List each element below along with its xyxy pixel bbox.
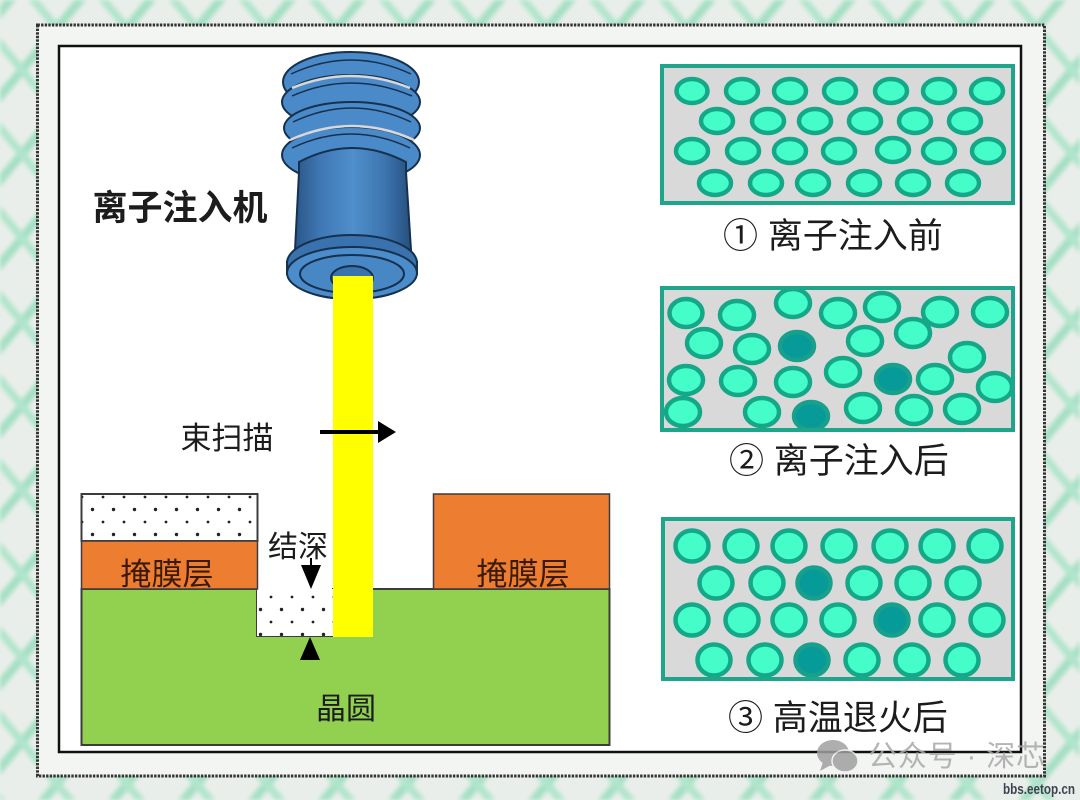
junction depth label: 结深 xyxy=(268,531,328,564)
ion implanter machine xyxy=(282,52,420,299)
cylinder body xyxy=(295,148,411,250)
wafer xyxy=(82,589,610,745)
panel 2: after implantation xyxy=(662,288,1013,430)
caption 2: ② 离子注入后 xyxy=(729,442,949,481)
caption 1: ① 离子注入前 xyxy=(723,217,943,256)
implanted region xyxy=(257,589,333,636)
disordered atoms xyxy=(666,289,1012,430)
lattice atoms 1 xyxy=(676,79,1004,195)
left mask layer: 掩膜层 xyxy=(120,557,214,592)
caption 3: ③ 高温退火后 xyxy=(728,699,948,738)
panel 1: before implantation xyxy=(662,66,1013,203)
label: wafer: 晶圆 xyxy=(316,693,376,726)
arrow: beam scan xyxy=(320,421,396,443)
right mask layer: 掩膜层 xyxy=(476,557,570,592)
re-ordered atoms xyxy=(676,530,1004,676)
arrow: junction depth top xyxy=(301,558,321,589)
icon: wechat bubbles xyxy=(817,740,858,772)
beam scan label: 束扫描 xyxy=(180,421,274,456)
left mask layer xyxy=(82,541,258,592)
diagram: ion implantation cross-section xyxy=(82,276,610,745)
watermark: wechat official account: 公众号 · 深芯 xyxy=(868,740,1045,773)
right mask layer xyxy=(434,494,610,592)
main black frame xyxy=(59,46,1021,752)
left photoresist dotted layer xyxy=(82,494,258,541)
arrow: junction depth bottom xyxy=(300,637,320,660)
machine label: 离子注入机 xyxy=(92,189,268,228)
flange stack xyxy=(282,52,420,183)
beam top over nozzle xyxy=(333,276,373,300)
panel 3: after annealing xyxy=(663,519,1013,679)
nozzle flange xyxy=(287,235,417,299)
ion beam xyxy=(333,276,373,637)
